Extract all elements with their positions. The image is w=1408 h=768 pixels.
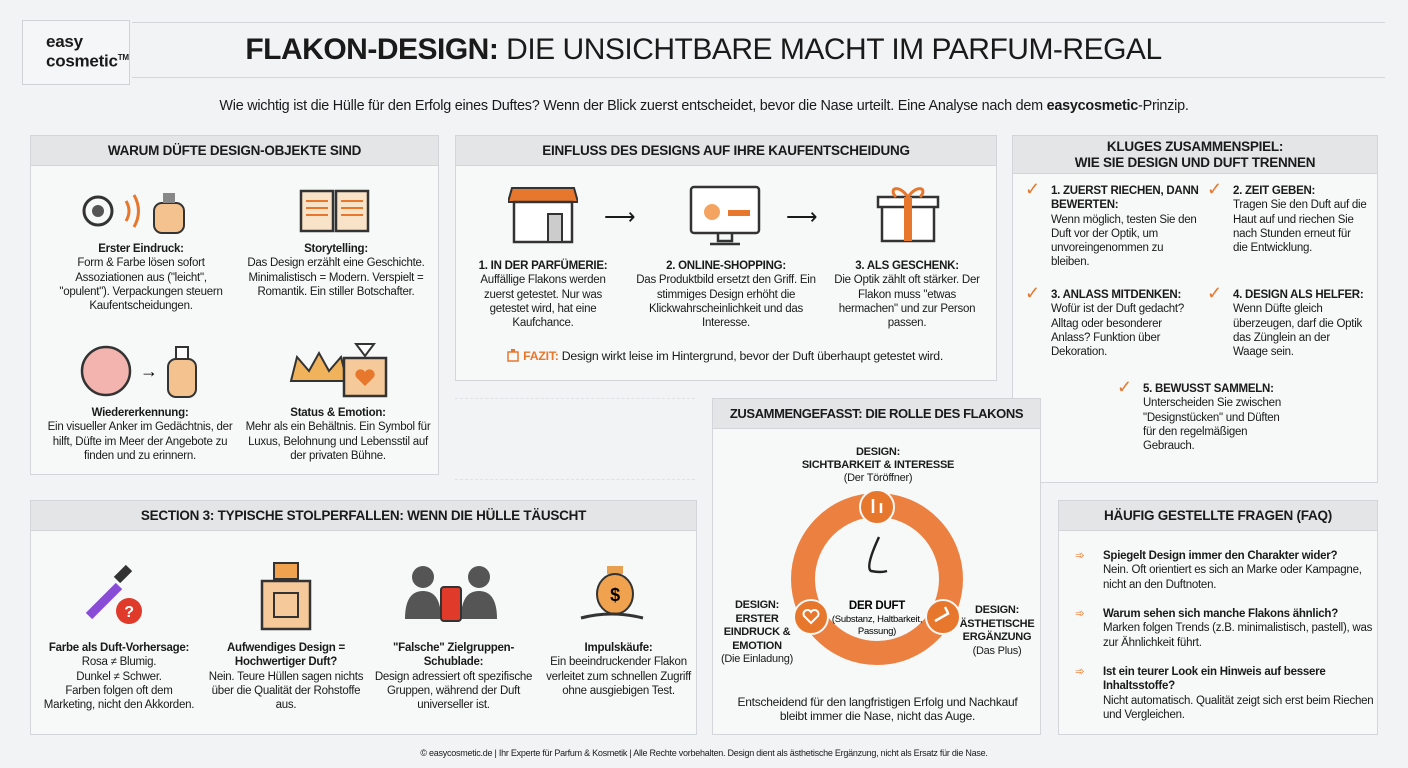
text: zielgruppen: Design adressiert oft spezifische Gruppen, während der Duft universeller ist. <box>375 671 532 711</box>
panel: zusammengefasst <box>712 398 1041 735</box>
tip 3: ✓ <box>1025 283 1040 303</box>
fazit: FAZIT: Design wirkt leise im Hintergrund, bevor der Duft überhaupt getestet wird. <box>523 349 943 363</box>
empty bracket frame <box>455 398 695 480</box>
arrow: ⟶ <box>604 204 635 229</box>
text: in der parfümerie: Auffällige Flakons werden zuerst getestet. Nur was getestet wird, hat eine Kaufchance. <box>480 274 606 329</box>
panel: stolperfallen: SECTION 3: TYPISCHE STOLPERFALLEN: WENN DIE HÜLLE TÄUSCHT <box>141 508 586 523</box>
tip 5 <box>1117 377 1281 452</box>
faq 1: ➾ <box>1075 550 1084 562</box>
panel: warum düfte design-objekte sind <box>30 135 439 475</box>
label top: SICHTBARKEIT & INTERESSE <box>802 459 954 471</box>
tip 1 <box>1025 179 1199 268</box>
icon: bottle <box>260 562 312 630</box>
text: storytelling: Storytelling: <box>304 243 368 255</box>
text: wiedererkennung: Ein visueller Anker im Gedächtnis, der hilft, Düfte im Meer der Angebote zu finden und zu erinnern. <box>48 421 232 462</box>
tip 2: ✓ <box>1207 179 1222 199</box>
tip 2 <box>1207 179 1366 254</box>
label left <box>721 599 793 665</box>
text: zielgruppen <box>375 642 532 711</box>
text: als geschenk: Die Optik zählt oft stärker. Der Flakon muss "etwas hermachen" und zur Person passen. <box>834 274 980 329</box>
tip 1: Wenn möglich, testen Sie den Duft vor der Optik, um unvoreingenommen zu bleiben. <box>1051 214 1197 268</box>
label right: (Das Plus) <box>973 644 1021 656</box>
text: online-shopping: 2. ONLINE-SHOPPING: <box>666 260 786 272</box>
label left: DESIGN: <box>735 599 779 611</box>
panel: faq: HÄUFIG GESTELLTE FRAGEN (FAQ) <box>1104 508 1332 523</box>
tip 1: ✓ <box>1025 179 1040 199</box>
subtitle: Wie wichtig ist die Hülle für den Erfolg eines Duftes? Wenn der Blick zuerst entscheidet, bevor die Nase urteilt. Eine Analyse nach dem easycosmetic-Prinzip. <box>219 98 1189 114</box>
label left: ERSTER <box>735 612 779 624</box>
icon: people <box>405 566 497 622</box>
text: storytelling: Das Design erzählt eine Geschichte. Minimalistisch = Modern. Verspielt = Romantik. Ein stiller Botschafter. <box>247 257 425 298</box>
icon: pipette <box>86 564 142 624</box>
label right <box>960 604 1034 656</box>
text: aufwendiges design: Nein. Teure Hüllen sagen nichts über die Qualität der Rohstoffe aus. <box>209 671 363 711</box>
text: farbe: Farben folgen oft dem Marketing, nicht den Akkorden. <box>44 685 194 711</box>
tip 3 <box>1025 283 1184 358</box>
tip 4: Wenn Düfte gleich überzeugen, darf die Optik das Zünglein an der Waage sein. <box>1233 303 1362 358</box>
text: farbe: Dunkel ≠ Schwer. <box>76 671 162 683</box>
ring chart <box>791 491 963 665</box>
tip 2: Tragen Sie den Duft auf die Haut auf und riechen Sie nach Stunden erneut für die Entwicklung. <box>1233 199 1366 254</box>
panel: warum düfte design-objekte sind: WARUM DÜFTE DESIGN-OBJEKTE SIND <box>108 143 361 158</box>
faq 1 <box>1075 550 1362 591</box>
icon: brain to bottle: → <box>140 361 158 381</box>
panel: stolperfallen <box>30 500 697 735</box>
icon: shop <box>508 187 578 244</box>
text: zielgruppen: Schublade: <box>424 656 483 668</box>
text: farbe <box>44 642 194 711</box>
faq 2: ➾ <box>1075 608 1084 620</box>
label right: ÄSTHETISCHE <box>960 618 1034 630</box>
faq 1: Spiegelt Design immer den Charakter wider? <box>1103 550 1337 562</box>
icon: pipette: ? <box>124 604 134 621</box>
tip 4: ✓ <box>1207 283 1222 303</box>
arrow: ⟶ <box>786 204 817 229</box>
text: impulskäufe: Impulskäufe: <box>585 642 652 654</box>
tip 5: 5. BEWUSST SAMMELN: <box>1143 383 1274 395</box>
faq 1: Nein. Oft orientiert es sich an Marke oder Kampagne, nicht an den Duftnoten. <box>1103 564 1362 591</box>
icon: hand money: $ <box>610 585 620 605</box>
ring chart: (Substanz, Haltbarkeit, <box>832 614 922 625</box>
text: status & emotion: Status & Emotion: <box>290 407 386 419</box>
label top: (Der Töröffner) <box>844 472 912 484</box>
panel: kluges zusammenspiel: KLUGES ZUSAMMENSPIEL: <box>1107 139 1283 154</box>
text: aufwendiges design: Hochwertiger Duft? <box>235 656 337 668</box>
logo: easy <box>46 32 83 51</box>
panel: einfluss des designs <box>455 135 997 381</box>
text: status & emotion: Mehr als ein Behältnis. Ein Symbol für Luxus, Belohnung und Lebensstil auf der privaten Bühne. <box>246 421 430 462</box>
text: zielgruppen: "Falsche" Zielgruppen- <box>393 642 514 654</box>
icon: eye and bottle <box>82 193 185 234</box>
panel: zusammengefasst: ZUSAMMENGEFASST: DIE ROLLE DES FLAKONS <box>730 406 1023 421</box>
text: erster eindruck: Erster Eindruck: <box>98 243 184 255</box>
icon: gift <box>876 187 940 242</box>
text: farbe: Rosa ≠ Blumig. <box>82 656 156 668</box>
faq 2: Marken folgen Trends (z.B. minimalistisch, pastell), was zur Ähnlichkeit führt. <box>1103 622 1372 649</box>
text: impulskäufe: Ein beeindruckender Flakon verleitet zum schnellen Zugriff ohne ausgiebigen Test. <box>546 656 691 697</box>
ring chart: Passung) <box>858 626 896 637</box>
text: aufwendiges design <box>209 642 364 711</box>
icon: monitor <box>690 186 760 246</box>
tip 3: 3. ANLASS MITDENKEN: <box>1051 289 1181 301</box>
panel: kluges zusammenspiel: WIE SIE DESIGN UND DUFT TRENNEN <box>1075 155 1315 170</box>
icon: crown and heart bottle <box>290 343 388 398</box>
tip 4 <box>1207 283 1363 358</box>
footer: © easycosmetic.de | Ihr Experte für Parfum & Kosmetik | Alle Rechte vorbehalten. Design dient als ästhetische Ergänzung, nicht als Ersatz für die Nase. <box>420 748 988 758</box>
icon: hand money <box>580 566 644 620</box>
title: FLAKON-DESIGN: DIE UNSICHTBARE MACHT IM PARFUM-REGAL <box>245 33 1162 66</box>
tip 5: Unterscheiden Sie zwischen "Designstücken" und Düften für den regelmäßigen Gebrauch. <box>1143 397 1281 452</box>
faq 3: ➾ <box>1075 666 1084 678</box>
label left: EINDRUCK & <box>724 626 790 638</box>
tip 1: 1. ZUERST RIECHEN, DANN BEWERTEN: <box>1051 185 1199 211</box>
tip 3: Wofür ist der Duft gedacht? Alltag oder besonderer Anlass? Funktion über Dekoration. <box>1051 303 1184 358</box>
text: farbe: Farbe als Duft-Vorhersage: <box>49 642 189 654</box>
panel: einfluss des designs: EINFLUSS DES DESIGNS AUF IHRE KAUFENTSCHEIDUNG <box>542 143 910 158</box>
logo <box>22 20 130 85</box>
text: als geschenk: 3. ALS GESCHENK: <box>855 260 959 272</box>
tip 2: 2. ZEIT GEBEN: <box>1233 185 1315 197</box>
label top: DESIGN: <box>856 446 900 458</box>
panel: faq <box>1058 500 1378 735</box>
text: wiedererkennung: Wiedererkennung: <box>92 407 188 419</box>
label right: ERGÄNZUNG <box>963 631 1031 643</box>
ring chart: DER DUFT <box>849 600 905 612</box>
text: in der parfümerie: 1. IN DER PARFÜMERIE: <box>479 260 607 272</box>
icon: brain to bottle <box>80 346 197 398</box>
panel: kluges zusammenspiel <box>1012 135 1378 483</box>
label top <box>802 446 954 484</box>
tip 5: ✓ <box>1117 377 1132 397</box>
faq 2 <box>1075 608 1372 649</box>
logo: cosmeticTM <box>46 52 129 71</box>
text: aufwendiges design: Aufwendiges Design = <box>227 642 345 654</box>
faq 3 <box>1075 666 1373 721</box>
faq 3: Ist ein teurer Look ein Hinweis auf bessere Inhaltsstoffe? <box>1103 666 1326 692</box>
faq 2: Warum sehen sich manche Flakons ähnlich? <box>1103 608 1338 620</box>
label right: DESIGN: <box>975 604 1019 616</box>
text: erster eindruck: Form & Farbe lösen sofort Assoziationen aus ("leicht", "opulent"). Verpackungen steuern Kaufentscheidungen. <box>59 257 223 312</box>
label left: (Die Einladung) <box>721 653 793 665</box>
text: online-shopping: Das Produktbild ersetzt den Griff. Ein stimmiges Design erhöht die Klickwahrscheinlichkeit und das Interesse. <box>636 274 816 329</box>
faq 3: Nicht automatisch. Qualität zeigt sich erst beim Riechen und Vergleichen. <box>1103 695 1373 721</box>
tip 4: 4. DESIGN ALS HELFER: <box>1233 289 1363 301</box>
label left: EMOTION <box>732 640 782 652</box>
icon: book <box>300 190 370 232</box>
title <box>132 22 1385 78</box>
conclusion: Entscheidend für den langfristigen Erfolg und Nachkauf bleibt immer die Nase, nicht das Auge. <box>737 695 1018 723</box>
